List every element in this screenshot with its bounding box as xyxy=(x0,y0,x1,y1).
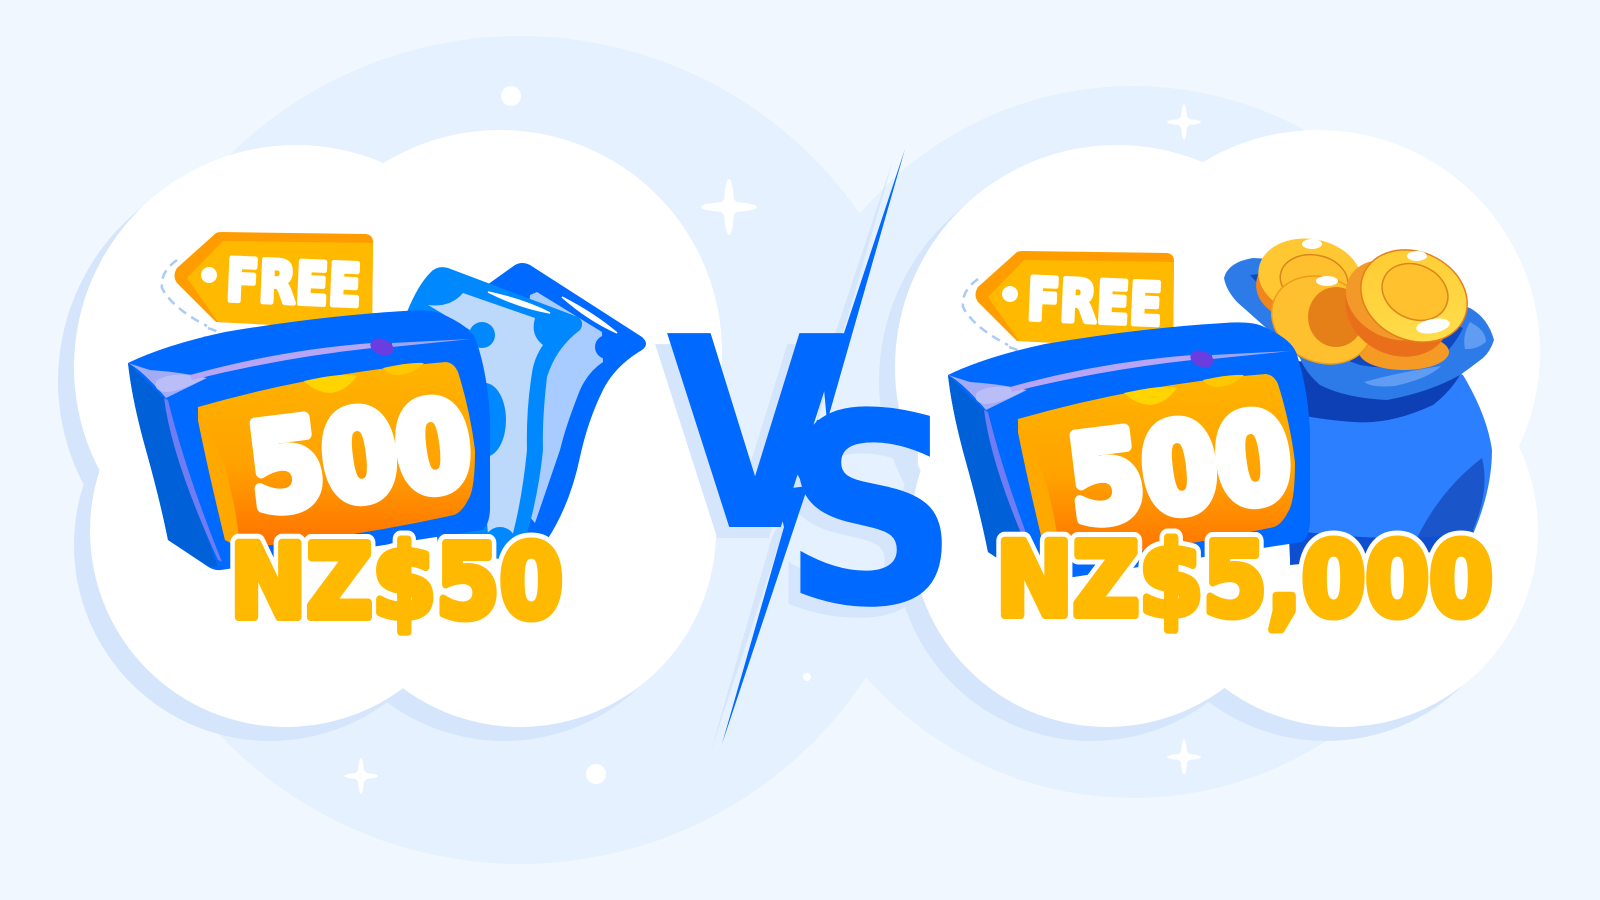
icon: right FREE tag xyxy=(963,251,1174,364)
panel: left white cloud xyxy=(74,130,722,727)
icon: left slot screen chest xyxy=(128,310,490,570)
screen value: 500 xyxy=(241,376,478,541)
back coin xyxy=(1253,241,1363,325)
left cloud shadow xyxy=(58,144,706,741)
orange screen xyxy=(1018,374,1295,560)
gold coins xyxy=(1252,231,1482,380)
background clouds xyxy=(106,36,1489,864)
label: NZ$50: NZ$50 xyxy=(230,523,563,642)
heading: VS: V xyxy=(666,280,846,590)
label: NZ$50: NZ$50 xyxy=(230,523,563,642)
icon: left FREE tag: FREE xyxy=(225,246,363,320)
icon: VS shadow: V xyxy=(654,291,834,601)
middle coin xyxy=(1257,260,1387,380)
coin highlights xyxy=(1415,316,1451,336)
sack rim xyxy=(1224,258,1494,400)
highlights xyxy=(488,292,550,313)
heading: VS: S xyxy=(781,358,960,666)
icon: left FREE tag xyxy=(162,232,373,345)
label: NZ$5,000: NZ$5,000 xyxy=(996,521,1493,640)
icon: right slot screen chest xyxy=(948,322,1310,582)
icon: VS shadow: S xyxy=(769,369,948,677)
icon: VS shadow xyxy=(654,160,948,754)
background sparkles and dots xyxy=(344,86,1201,794)
icon: right FREE tag: FREE xyxy=(1026,265,1164,339)
screen value: 500 xyxy=(1061,388,1298,553)
heading: VS xyxy=(666,149,960,744)
right cloud shadow xyxy=(879,144,1524,741)
stacked coin xyxy=(1330,246,1466,374)
illustration: banknotes xyxy=(407,263,646,560)
back banknote xyxy=(470,263,646,560)
sack neck xyxy=(1285,360,1460,422)
illustration: money sack xyxy=(1224,231,1494,565)
lower coin xyxy=(1359,334,1449,370)
front banknote xyxy=(407,267,582,560)
orange screen xyxy=(198,362,475,548)
panel: right white cloud xyxy=(895,130,1540,727)
sack body xyxy=(1280,368,1492,560)
label: NZ$5,000: NZ$5,000 xyxy=(996,521,1493,640)
